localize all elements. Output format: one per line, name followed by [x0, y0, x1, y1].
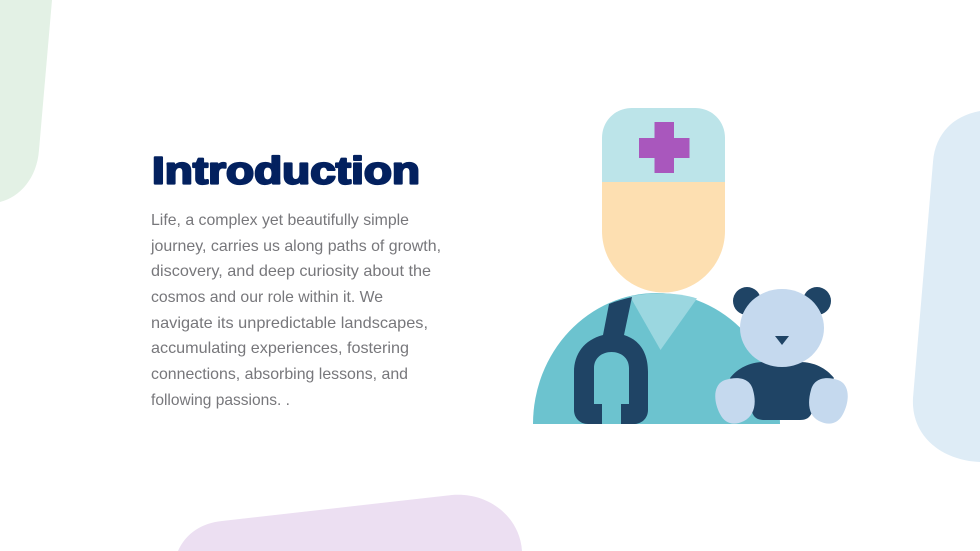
body text: following passions. . — [151, 392, 290, 409]
teddy bear — [715, 287, 848, 424]
icon: medical cross — [639, 122, 690, 173]
illustration: doctor with teddy bear — [533, 108, 848, 424]
bear right arm — [809, 378, 848, 424]
doctor cap — [602, 108, 725, 182]
bear nose — [775, 336, 789, 345]
body text: navigate its unpredictable landscapes, — [151, 315, 428, 332]
decorative blob: right blue — [913, 111, 980, 462]
bear ears — [733, 287, 761, 315]
doctor face — [602, 182, 725, 292]
bear torso — [730, 362, 834, 420]
decorative blob: bottom purple — [178, 495, 522, 551]
body text: connections, absorbing lessons, and — [151, 366, 408, 383]
stethoscope — [574, 297, 648, 424]
body text: cosmos and our role within it. We — [151, 289, 383, 306]
body text: accumulating experiences, fostering — [151, 340, 409, 357]
doctor body — [533, 293, 780, 424]
body text: Life, a complex yet beautifully simple — [151, 212, 409, 229]
decorative blob: top left green — [0, 0, 52, 202]
body text: discovery, and deep curiosity about the — [151, 263, 431, 280]
bear left arm — [715, 378, 755, 424]
title: Introduction — [152, 150, 420, 192]
bear head — [740, 289, 824, 367]
scrubs collar — [630, 293, 697, 350]
body text — [150, 212, 441, 409]
body text: journey, carries us along paths of growth, — [150, 238, 441, 255]
